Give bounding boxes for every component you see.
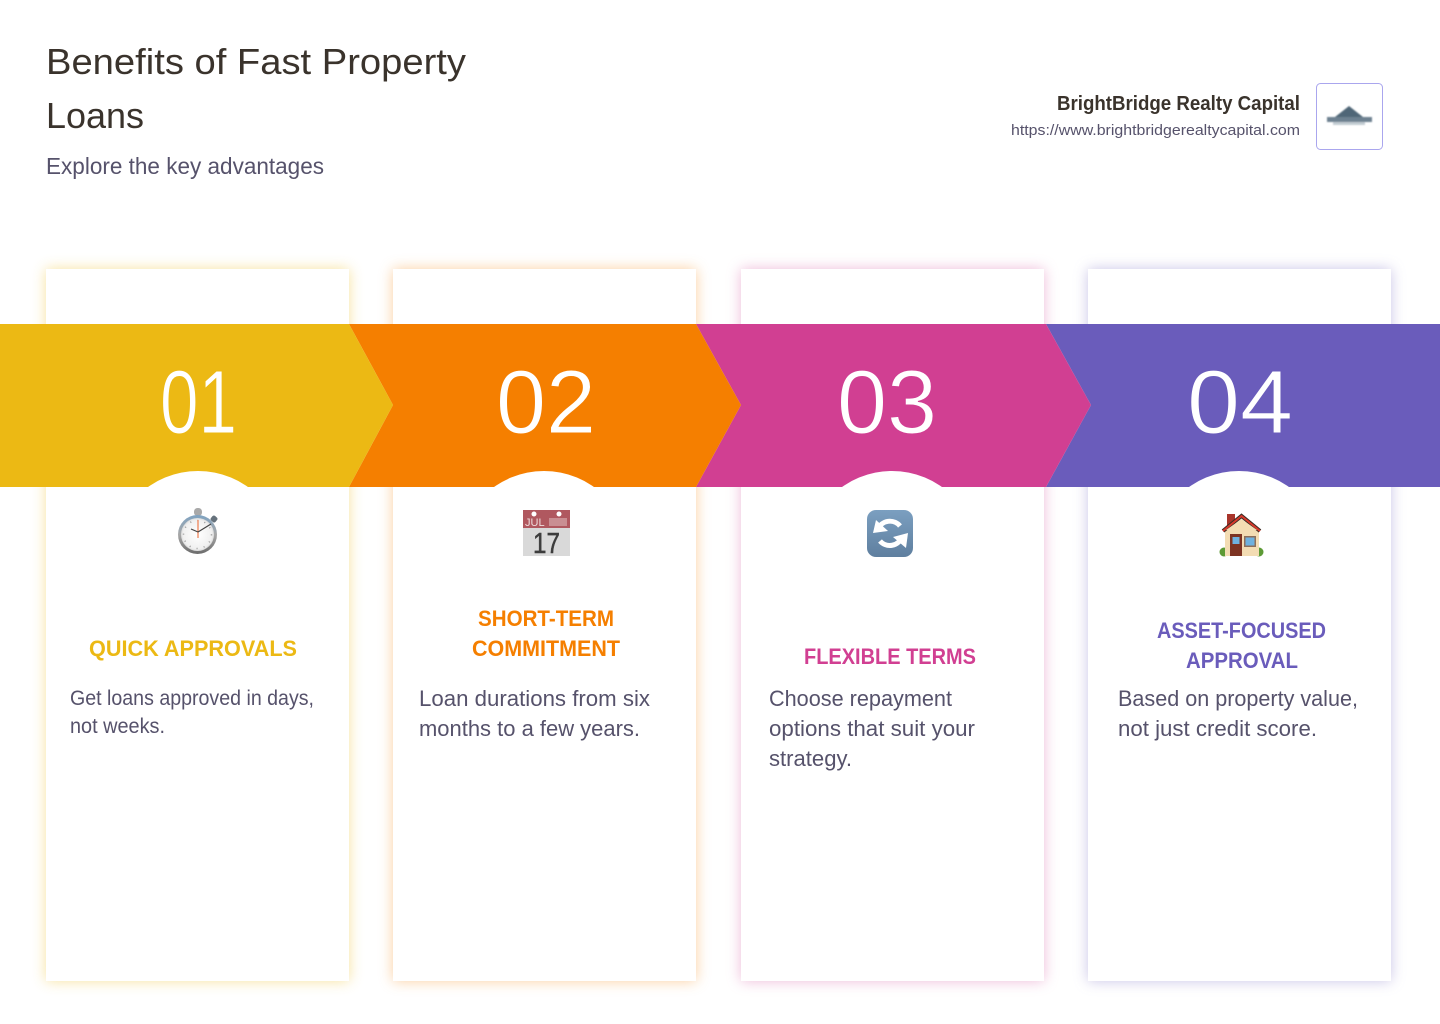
heading: asset-focused approval	[1157, 618, 1326, 673]
text: card 3 body	[769, 686, 975, 771]
text: card 4 body: not just credit score.	[1118, 716, 1317, 741]
heading: asset-focused approval: APPROVAL	[1186, 648, 1298, 673]
text: card 3 body: options that suit your	[769, 716, 975, 741]
company url: https://www.brightbridgerealtycapital.com	[1011, 122, 1300, 139]
icon: calendar: 17	[533, 528, 560, 560]
arrow 2	[349, 324, 741, 487]
heading: short-term commitment: COMMITMENT	[472, 636, 621, 661]
text: card 1 body: Get loans approved in days,	[70, 687, 314, 710]
title: Loans	[46, 95, 144, 136]
number 04: 04	[1187, 353, 1293, 453]
arrow 4	[1046, 324, 1440, 487]
heading: asset-focused approval: ASSET-FOCUSED	[1157, 618, 1326, 643]
heading: quick approvals: QUICK APPROVALS	[89, 636, 297, 661]
heading: flexible terms: FLEXIBLE TERMS	[804, 644, 976, 669]
card 2	[393, 269, 696, 981]
heading: short-term commitment: SHORT-TERM	[478, 606, 614, 631]
text: card 1 body: not weeks.	[70, 715, 165, 738]
subtitle: Explore the key advantages	[46, 153, 324, 179]
text: card 2 body: Loan durations from six	[419, 686, 651, 711]
number 01: 01	[160, 353, 237, 453]
text: card 3 body: Choose repayment	[769, 686, 953, 711]
icon: sync arrows	[867, 510, 913, 557]
company name: BrightBridge Realty Capital	[1057, 93, 1300, 115]
icon: calendar	[523, 510, 570, 560]
card 4	[1088, 269, 1391, 981]
number 02: 02	[496, 353, 596, 453]
text: card 2 body: months to a few years.	[419, 716, 640, 741]
number 03: 03	[837, 353, 937, 453]
title	[46, 41, 466, 136]
arrow 3	[696, 324, 1091, 487]
icon: calendar: JUL	[525, 517, 545, 529]
card 1	[46, 269, 349, 981]
circular notches	[148, 471, 1289, 487]
arrow 1	[0, 324, 393, 487]
company logo	[1316, 84, 1382, 150]
text: card 4 body: Based on property value,	[1118, 686, 1358, 711]
card 3	[741, 269, 1044, 981]
icon: stopwatch	[178, 508, 218, 554]
icon: house	[1220, 514, 1264, 556]
title: Benefits of Fast Property	[46, 41, 466, 82]
text: card 1 body	[70, 687, 314, 738]
text: card 2 body	[419, 686, 651, 741]
text: card 3 body: strategy.	[769, 746, 852, 771]
heading: short-term commitment	[472, 606, 621, 661]
text: card 4 body	[1118, 686, 1358, 741]
